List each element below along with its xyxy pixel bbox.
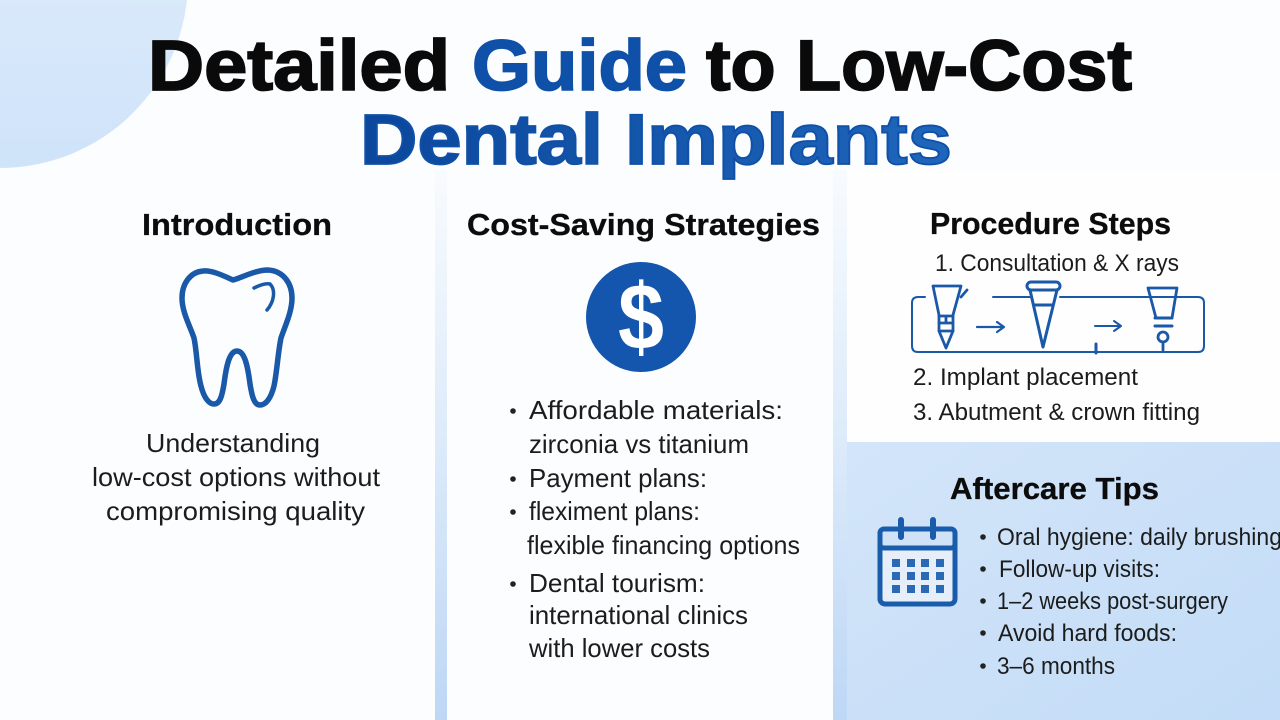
aftercare bullet list: Follow-up visits: <box>999 556 1160 583</box>
decorative corner circle <box>0 0 188 168</box>
panel: introduction <box>92 207 381 526</box>
gutter between introduction and cost-saving panels <box>435 170 447 720</box>
cost-saving bullet list: flexible financing options <box>527 530 800 560</box>
implant procedure diagram <box>912 282 1204 353</box>
intro text: Understanding <box>146 428 320 458</box>
cost-saving bullet list: zirconia vs titanium <box>529 429 749 459</box>
step 3: 3. Abutment & crown fitting <box>913 399 1200 426</box>
cost-saving bullet list: Payment plans: <box>529 463 707 493</box>
aftercare bullet list: Avoid hard foods: <box>998 620 1177 647</box>
icon: dollar coin <box>586 262 696 372</box>
panel: aftercare tips <box>847 442 1280 720</box>
heading: introduction: Introduction <box>142 207 332 242</box>
cost-saving bullet list <box>510 395 800 663</box>
intro text: compromising quality <box>106 496 365 526</box>
cost-saving bullet list: fleximent plans: <box>529 496 700 526</box>
panel: cost-saving strategies <box>467 207 820 663</box>
cost-saving bullet list: Dental tourism: <box>529 568 705 598</box>
title: Guide <box>472 27 687 106</box>
aftercare background <box>847 442 1280 720</box>
cost-saving bullet list: Affordable materials: <box>529 395 783 425</box>
arrow: step two to three <box>1095 321 1121 331</box>
icon: tooth <box>182 270 292 405</box>
heading: procedure steps: Procedure Steps <box>930 206 1171 241</box>
panel: procedure steps <box>847 170 1280 442</box>
intro text: low-cost options without <box>92 462 381 492</box>
cost-saving bullet list: international clinics <box>529 600 748 630</box>
aftercare bullet list: 3–6 months <box>997 653 1115 680</box>
icon: dollar coin: $ <box>618 264 664 369</box>
arrow: step one to two <box>977 322 1004 332</box>
icon: calendar <box>880 520 955 604</box>
step 1: 1. Consultation & X rays <box>935 250 1179 277</box>
heading: cost-saving strategies: Cost-Saving Strategies <box>467 207 820 242</box>
mark on baseline <box>1094 344 1098 353</box>
title: Detailed <box>148 27 450 106</box>
step 2: 2. Implant placement <box>913 364 1138 391</box>
aftercare bullet list: 1–2 weeks post-surgery <box>997 588 1228 615</box>
icon: implant screw <box>1027 282 1060 347</box>
title: Dental Implants <box>360 101 952 180</box>
icon: drill <box>933 286 967 348</box>
intro text <box>92 428 381 526</box>
title: to Low-Cost <box>706 27 1132 106</box>
cost-saving bullet list: with lower costs <box>528 633 710 663</box>
gutter between cost-saving and right panels <box>833 170 847 720</box>
title <box>148 27 1132 180</box>
heading: aftercare tips: Aftercare Tips <box>950 471 1159 506</box>
procedure panel background <box>847 170 1280 442</box>
aftercare bullet list <box>980 524 1280 680</box>
icon: crown abutment <box>1148 288 1177 350</box>
